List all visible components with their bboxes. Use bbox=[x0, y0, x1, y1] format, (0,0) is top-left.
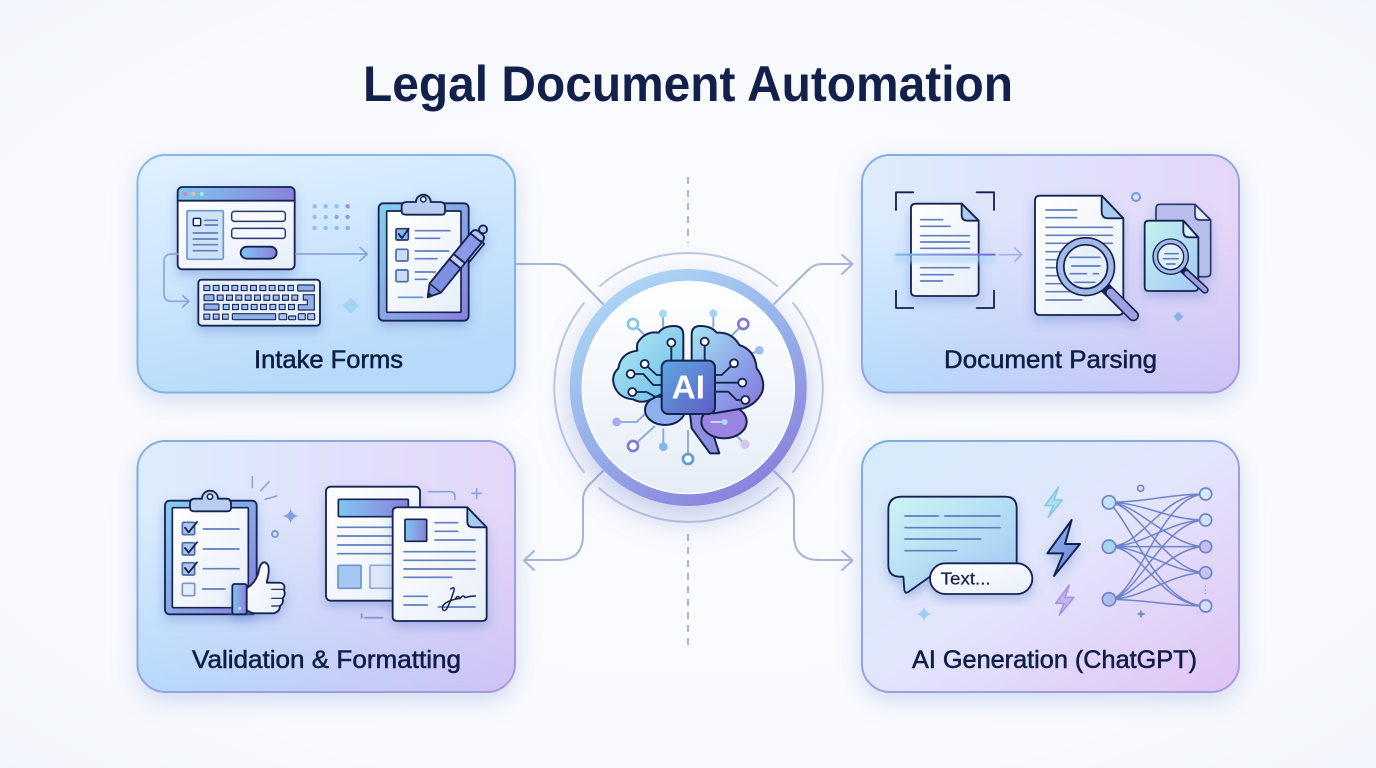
arrow: to document parsing bbox=[774, 255, 852, 304]
icon: scan brackets bbox=[896, 192, 994, 308]
icon: text pill: Text... bbox=[941, 568, 991, 588]
icon: clipboard with checklist and pen bbox=[379, 195, 493, 321]
arrow: form to clipboard bbox=[296, 247, 367, 261]
central AI hub bbox=[554, 253, 823, 522]
thin outer arcs bbox=[554, 253, 823, 522]
icon: document with magnifier bbox=[1035, 196, 1133, 316]
arrow: to validation and formatting bbox=[524, 551, 534, 570]
scan line bbox=[895, 254, 996, 263]
panel: intake forms bbox=[138, 155, 515, 392]
small ring decoration bbox=[272, 531, 278, 537]
panel: document parsing bbox=[862, 155, 1239, 392]
icon: small purple bolt bbox=[1056, 585, 1074, 615]
small tick decoration bbox=[362, 614, 383, 618]
icon: browser form window bbox=[178, 187, 295, 269]
icon: text pill bbox=[930, 563, 1032, 594]
icon: small cyan bolt bbox=[1045, 487, 1062, 517]
inner white disc bbox=[582, 282, 794, 494]
icon: chat bubble bbox=[888, 497, 1017, 593]
icon group: scanning and magnified documents bbox=[895, 192, 1211, 322]
circuit dots bbox=[627, 338, 749, 404]
gradient ring bbox=[576, 275, 801, 500]
dot grid decoration bbox=[312, 204, 350, 230]
icon: checklist clipboard bbox=[165, 491, 257, 614]
icon: AI brain bbox=[612, 309, 764, 464]
icon: pen bbox=[422, 222, 493, 304]
icon group: chat, lightning and neural network bbox=[888, 485, 1212, 622]
icon group: checklist, approval and formatted documents bbox=[165, 477, 487, 621]
right hemisphere bbox=[692, 326, 763, 413]
small ring decoration bbox=[1132, 193, 1140, 201]
brain stem bbox=[690, 413, 719, 453]
rays decoration bbox=[252, 477, 277, 499]
lower right lobe bbox=[701, 405, 747, 438]
icon: scanned document bbox=[911, 204, 979, 296]
arrow: scan to parsed document bbox=[999, 248, 1022, 261]
arrow: form to keyboard bbox=[164, 254, 189, 307]
icon: stacked documents with magnifier bbox=[1145, 204, 1211, 291]
icon: neural network bbox=[1102, 485, 1212, 617]
title: Legal Document Automation bbox=[363, 56, 1013, 112]
AI chip: AI bbox=[672, 370, 705, 407]
small lobe node bbox=[711, 419, 728, 425]
sparkle decoration bbox=[916, 606, 932, 622]
lower left lobe bbox=[645, 395, 685, 425]
label: AI generation: AI Generation (ChatGPT) bbox=[912, 646, 1197, 674]
arrow: to AI generation bbox=[842, 551, 852, 570]
icon: main bolt bbox=[1047, 520, 1080, 576]
icon: formatted page bbox=[326, 487, 420, 601]
panel: AI generation bbox=[862, 441, 1239, 692]
icon: signed document bbox=[393, 507, 487, 621]
panel: validation and formatting bbox=[138, 441, 515, 692]
icon group: form window, keyboard and clipboard bbox=[164, 187, 493, 326]
label: validation and formatting: Validation & Formatting bbox=[192, 646, 461, 674]
icon: keyboard bbox=[198, 280, 320, 326]
sparkle decoration bbox=[283, 508, 299, 524]
icon: thumbs up bbox=[232, 562, 285, 614]
left hemisphere bbox=[613, 326, 683, 402]
circuit traces bbox=[631, 342, 745, 400]
corner line and plus decoration bbox=[428, 489, 481, 499]
external circuit nodes bbox=[612, 309, 764, 464]
label: document parsing: Document Parsing bbox=[944, 346, 1157, 374]
AI chip bbox=[662, 361, 715, 414]
diamond decoration bbox=[343, 298, 359, 314]
small diamond decoration bbox=[1173, 312, 1183, 322]
connectors and guide lines bbox=[516, 177, 852, 650]
label: intake forms: Intake Forms bbox=[254, 346, 403, 374]
